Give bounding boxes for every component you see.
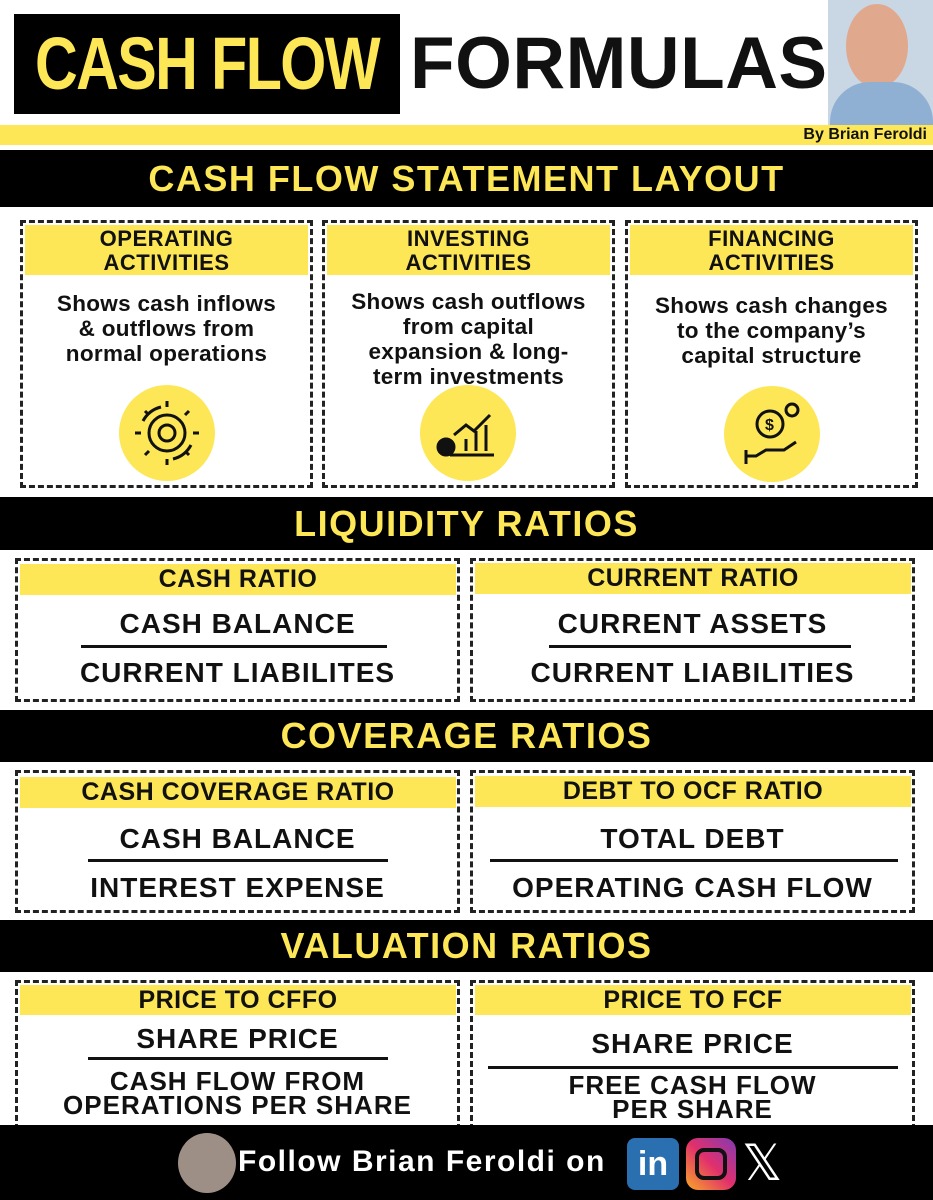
section header: liquidity: LIQUIDITY RATIOS bbox=[294, 503, 639, 544]
panel: financing: capital structure bbox=[681, 343, 862, 368]
panel: current ratio bbox=[470, 558, 915, 702]
panel: financing: to the company’s bbox=[677, 318, 866, 343]
panel: price to fcf: FREE CASH FLOW bbox=[568, 1070, 816, 1100]
section header: layout: CASH FLOW STATEMENT LAYOUT bbox=[148, 158, 785, 199]
panel: financing bbox=[625, 220, 918, 488]
icon: linkedin: in bbox=[638, 1145, 668, 1183]
panel: investing: from capital bbox=[403, 314, 534, 339]
icon: x: 𝕏 bbox=[742, 1135, 782, 1191]
title: formulas: FORMULAS bbox=[410, 23, 828, 104]
icon: hand coin bbox=[724, 386, 820, 482]
panel: investing: INVESTING bbox=[407, 226, 530, 251]
panel: cash coverage: INTEREST EXPENSE bbox=[90, 872, 385, 903]
panel: cash ratio bbox=[15, 558, 460, 702]
yellow byline band: By Brian Feroldi bbox=[803, 126, 927, 143]
panel: cash ratio: CASH RATIO bbox=[159, 565, 317, 593]
panel: investing: expansion & long- bbox=[368, 339, 569, 364]
panel: price to cffo bbox=[15, 980, 460, 1130]
panel: operating: Shows cash inflows bbox=[57, 291, 276, 316]
panel: cash coverage: CASH BALANCE bbox=[120, 823, 356, 854]
panel: operating: & outflows from bbox=[79, 316, 254, 341]
panel: financing: Shows cash changes bbox=[655, 293, 888, 318]
panel: price to cffo: OPERATIONS PER SHARE bbox=[63, 1090, 412, 1120]
panel: investing: term investments bbox=[373, 364, 564, 389]
panel: operating: OPERATING bbox=[100, 226, 233, 251]
yellow byline band bbox=[0, 125, 933, 145]
section header: valuation: VALUATION RATIOS bbox=[280, 925, 652, 966]
panel: cash coverage: CASH COVERAGE RATIO bbox=[81, 778, 395, 806]
footer bbox=[0, 1125, 933, 1200]
panel: current ratio: CURRENT RATIO bbox=[587, 564, 799, 592]
panel: price to cffo: SHARE PRICE bbox=[136, 1023, 339, 1054]
panel: cash coverage bbox=[15, 770, 460, 913]
panel: operating: ACTIVITIES bbox=[103, 250, 230, 275]
panel: debt to ocf: OPERATING CASH FLOW bbox=[512, 872, 873, 903]
icon: instagram bbox=[686, 1138, 736, 1190]
footer text: Follow Brian Feroldi on bbox=[238, 1145, 606, 1178]
panel: financing: ACTIVITIES bbox=[708, 250, 834, 275]
icon: hand coin: $ bbox=[765, 417, 774, 434]
panel: cash ratio: CURRENT LIABILITES bbox=[80, 657, 395, 688]
section header: coverage bbox=[0, 710, 933, 762]
panel: price to fcf: SHARE PRICE bbox=[591, 1028, 794, 1059]
icon: gear bbox=[119, 385, 215, 481]
title block: CASH FLOW bbox=[35, 22, 379, 105]
panel: investing: Shows cash outflows bbox=[351, 289, 586, 314]
icon: linkedin bbox=[627, 1138, 679, 1190]
panel: price to fcf: PER SHARE bbox=[612, 1094, 773, 1124]
section header: liquidity bbox=[0, 497, 933, 550]
footer avatar bbox=[178, 1133, 236, 1193]
panel: debt to ocf bbox=[470, 770, 915, 913]
author photo bbox=[828, 0, 933, 125]
panel: investing: ACTIVITIES bbox=[405, 250, 532, 275]
panel: debt to ocf: DEBT TO OCF RATIO bbox=[563, 777, 823, 805]
panel: current ratio: CURRENT LIABILITIES bbox=[531, 657, 854, 688]
panel: price to fcf: PRICE TO FCF bbox=[603, 986, 783, 1014]
panel: price to fcf bbox=[470, 980, 915, 1130]
panel: operating bbox=[20, 220, 313, 488]
panel: debt to ocf: TOTAL DEBT bbox=[600, 823, 785, 854]
section header: valuation bbox=[0, 920, 933, 972]
panel: operating: normal operations bbox=[66, 341, 267, 366]
section header: layout bbox=[0, 150, 933, 207]
panel: price to cffo: CASH FLOW FROM bbox=[110, 1066, 365, 1096]
icon: chart bbox=[420, 385, 516, 481]
panel: financing: FINANCING bbox=[708, 226, 835, 251]
panel: price to cffo: PRICE TO CFFO bbox=[138, 986, 338, 1014]
section header: coverage: COVERAGE RATIOS bbox=[281, 715, 652, 756]
panel: investing bbox=[322, 220, 615, 488]
panel: cash ratio: CASH BALANCE bbox=[120, 608, 356, 639]
panel: current ratio: CURRENT ASSETS bbox=[558, 608, 827, 639]
